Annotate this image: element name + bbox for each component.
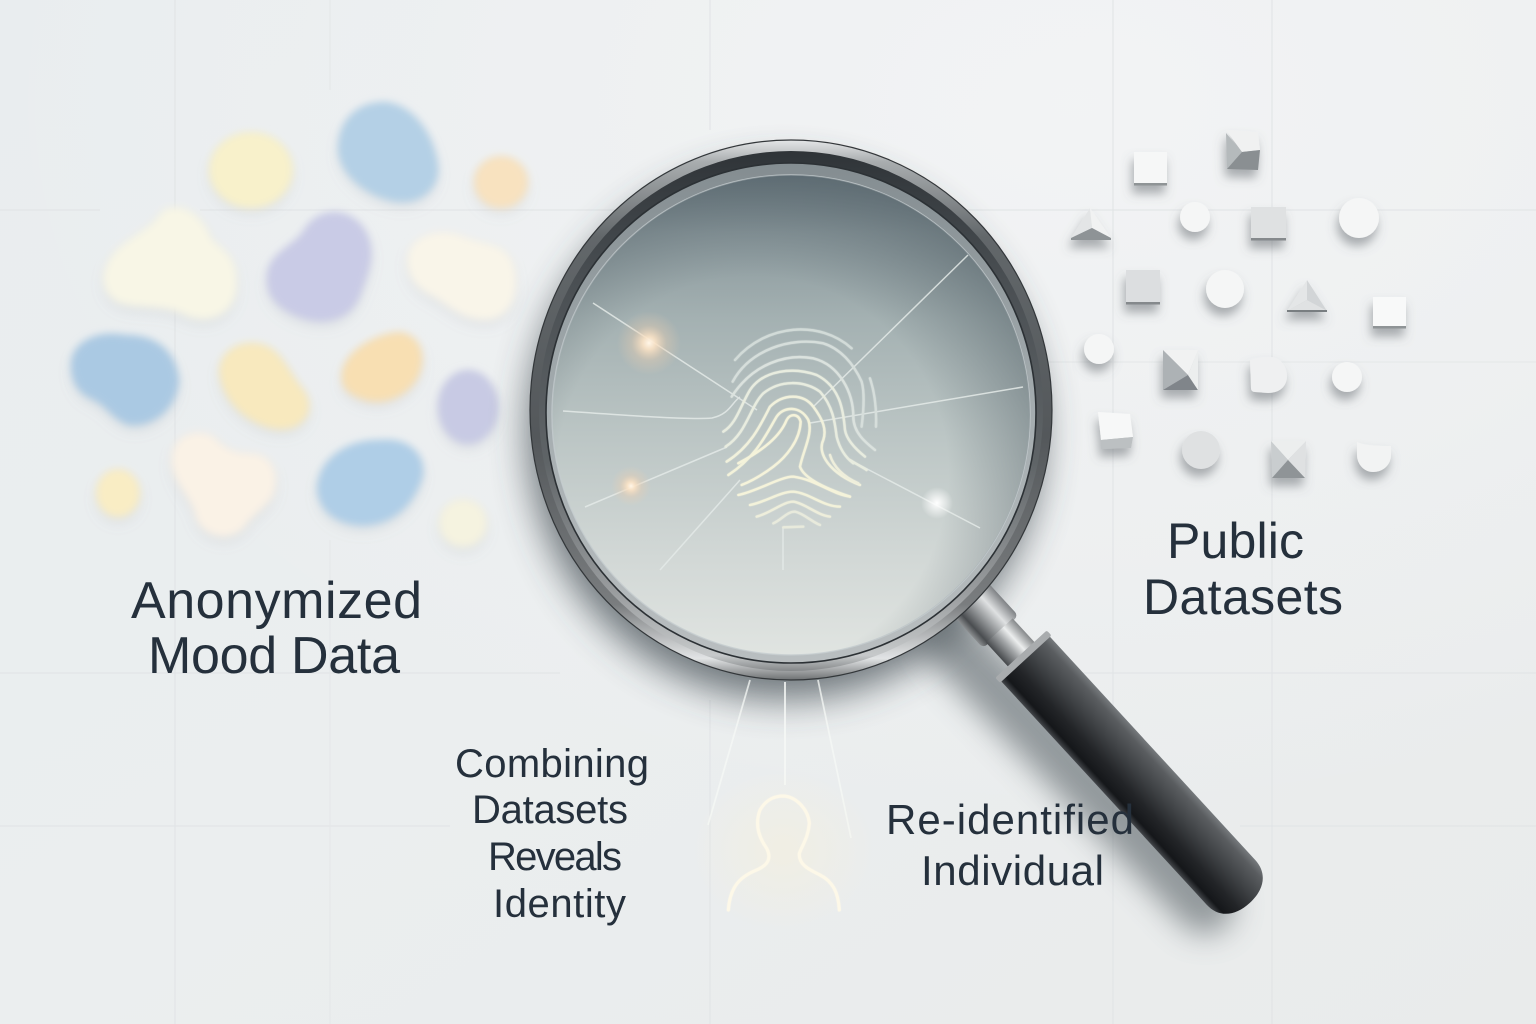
blob: large cream xyxy=(108,212,232,314)
magnifying glass lens xyxy=(530,140,1052,680)
shape: large circle xyxy=(1339,198,1379,238)
shape: pyramid xyxy=(1287,280,1327,312)
shape: small circle right xyxy=(1332,362,1362,392)
shape: small circle xyxy=(1084,334,1114,364)
shape: cube bottom xyxy=(1098,412,1133,449)
shape: four-face pyramid xyxy=(1271,441,1306,478)
handle collar xyxy=(952,582,1018,648)
blob: blue bottom xyxy=(322,445,418,520)
label: public datasets xyxy=(1143,513,1343,625)
lens outer frame xyxy=(530,140,1052,680)
shape: grey square 2 xyxy=(1126,270,1160,304)
blob: small yellow xyxy=(101,474,135,512)
shape: white square xyxy=(1134,152,1167,186)
blob: cream bottom xyxy=(176,437,271,532)
reveal rays xyxy=(708,680,851,838)
ray left xyxy=(708,680,750,825)
blob: orange middle xyxy=(347,337,417,397)
glass vignette xyxy=(552,175,1030,655)
panel: public datasets geometric shapes xyxy=(1071,130,1406,478)
magnifying glass handle xyxy=(944,574,1276,927)
label: combining datasets reveals identity: Combining xyxy=(455,742,649,786)
handle drop shadow xyxy=(950,640,1205,905)
label: anonymized mood data: Anonymized xyxy=(131,572,422,630)
label: combining datasets reveals identity xyxy=(455,742,649,926)
glow: lower left light node xyxy=(611,466,651,506)
shape: half round xyxy=(1357,442,1391,472)
label: public datasets: Public xyxy=(1167,513,1304,569)
label: combining datasets reveals identity: Identity xyxy=(493,882,626,926)
glass xyxy=(552,175,1030,655)
ray centre xyxy=(784,682,786,785)
shape: circle 2 xyxy=(1206,270,1244,308)
glow: white light node xyxy=(921,487,953,519)
connecting lines xyxy=(563,255,1023,570)
blob: purple small xyxy=(443,375,493,439)
outline xyxy=(728,796,839,910)
shape: grey circle xyxy=(1182,431,1220,469)
warm glow xyxy=(693,770,873,930)
label: anonymized mood data xyxy=(131,572,422,685)
blob: small cream xyxy=(444,504,482,542)
label: anonymized mood data: Mood Data xyxy=(148,627,400,685)
fingerprint xyxy=(723,329,876,527)
label: re-identified individual: Individual xyxy=(921,847,1104,894)
shape: circle xyxy=(1180,202,1210,232)
lens drop shadow xyxy=(527,164,1043,700)
ray right xyxy=(818,680,851,838)
shape: folded square xyxy=(1163,350,1198,390)
shape: white square right xyxy=(1373,297,1406,328)
label: combining datasets reveals identity: Reveals xyxy=(488,835,622,879)
glow: orange light node xyxy=(617,311,681,375)
blob: purple centre xyxy=(272,217,366,316)
label: re-identified individual: Re-identified xyxy=(886,796,1134,843)
handle neck xyxy=(986,618,1036,668)
lens bevel xyxy=(546,163,1036,663)
handle flange xyxy=(995,630,1052,683)
label: public datasets: Datasets xyxy=(1143,569,1343,625)
shape: cube top xyxy=(1226,130,1260,170)
shape: rounded square xyxy=(1250,357,1287,393)
lens dark band xyxy=(539,151,1043,671)
blob: cream right xyxy=(412,237,511,315)
blob: blue top xyxy=(343,107,433,197)
label: combining datasets reveals identity: Datasets xyxy=(472,788,628,832)
label: re-identified individual xyxy=(886,796,1134,894)
handle grip xyxy=(999,635,1274,925)
panel: anonymized mood data blobs xyxy=(76,107,523,542)
blob: small orange xyxy=(479,161,523,203)
person silhouette icon xyxy=(693,770,873,930)
blob: blue left xyxy=(76,339,174,420)
blob: yellow top xyxy=(214,137,288,203)
blob: yellow middle xyxy=(224,348,304,425)
shape: triangle xyxy=(1071,208,1111,240)
shape: grey square xyxy=(1251,207,1286,240)
